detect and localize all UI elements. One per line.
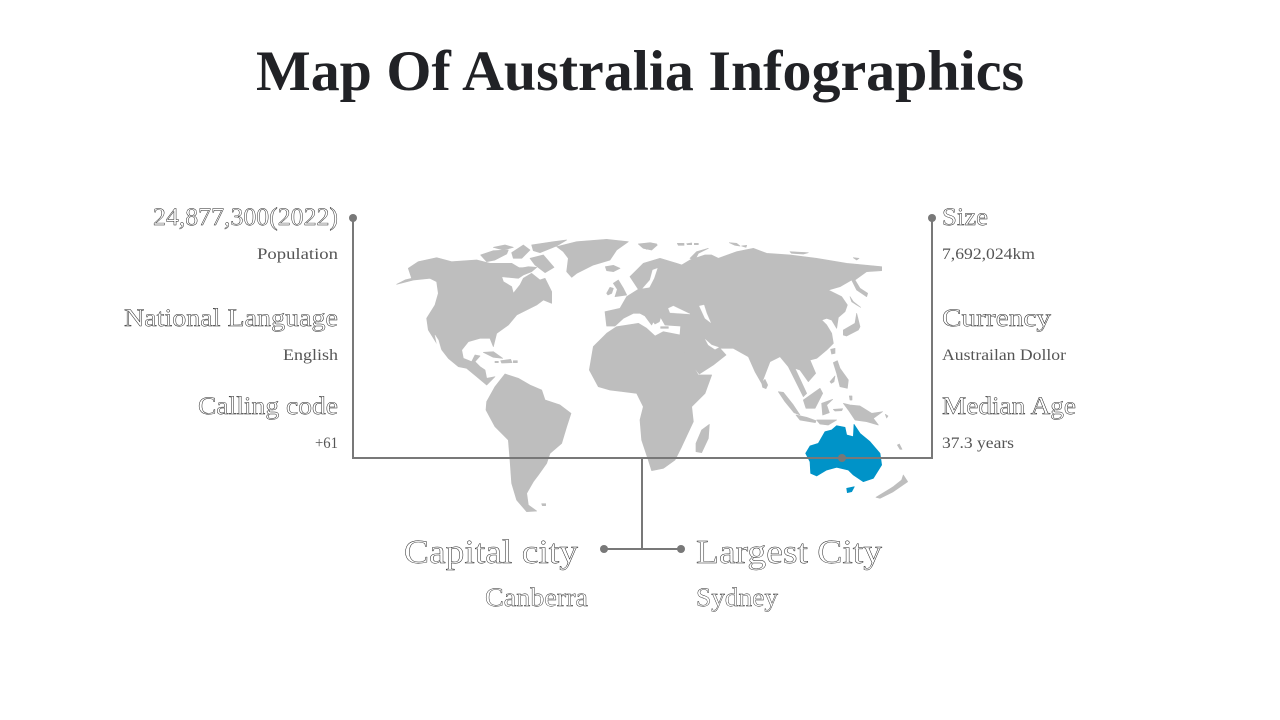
size block <box>942 204 1035 263</box>
connector lines <box>353 218 932 549</box>
connector dots <box>349 214 936 553</box>
africa and eurasia <box>589 243 908 498</box>
capital city block: Capital city <box>404 534 578 571</box>
capital city block <box>404 534 588 612</box>
population block: Population <box>257 246 338 263</box>
capital city block: Canberra <box>485 583 588 612</box>
currency block: Austrailan Dollor <box>942 347 1067 364</box>
population block: 24,877,300(2022) <box>153 204 338 231</box>
calling code block: Calling code <box>198 393 338 420</box>
currency block <box>942 305 1067 364</box>
median age block: 37.3 years <box>942 435 1014 452</box>
national language block <box>124 305 338 364</box>
largest city block: Sydney <box>696 583 778 612</box>
title: Map Of Australia Infographics <box>256 40 1024 103</box>
national language block: English <box>283 347 338 364</box>
largest city block: Largest City <box>696 534 882 571</box>
largest city block <box>696 534 882 612</box>
australia highlighted <box>806 424 882 493</box>
median age block: Median Age <box>942 393 1076 420</box>
population block <box>153 204 338 263</box>
americas and greenland <box>397 239 657 512</box>
calling code block: +61 <box>315 435 338 452</box>
median age block <box>942 393 1076 452</box>
calling code block <box>198 393 338 452</box>
world map <box>397 239 908 512</box>
size block: Size <box>942 204 988 231</box>
national language block: National Language <box>124 305 338 332</box>
size block: 7,692,024km <box>942 246 1035 263</box>
currency block: Currency <box>942 305 1052 332</box>
